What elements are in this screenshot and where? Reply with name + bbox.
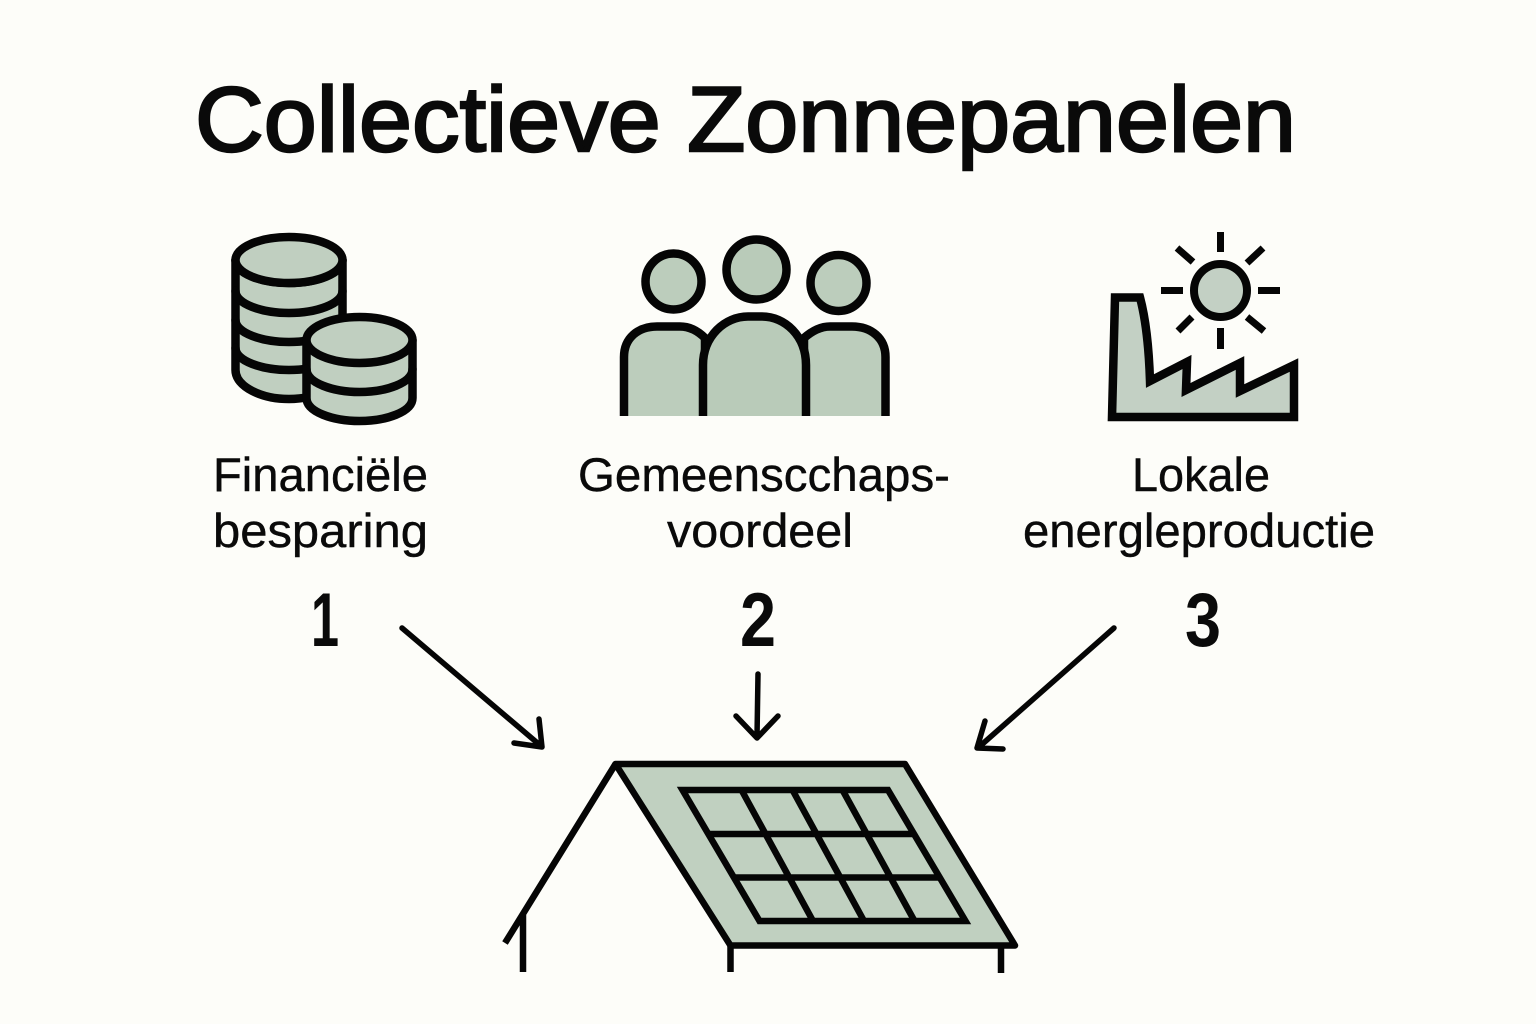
arrow 2 [736, 674, 778, 738]
label: Gemeenschapsvoordeel [578, 448, 950, 557]
icon: coin stacks [236, 237, 412, 421]
small coin stack [306, 317, 412, 421]
person left [624, 254, 705, 430]
number 3: 3 [1185, 578, 1221, 663]
person centre [703, 240, 806, 430]
arrow 3 [977, 628, 1114, 749]
label: Lokale energieproductie: Lokale [1132, 448, 1270, 501]
label: Financiele besparing: Financiële [213, 448, 428, 501]
label: Financiele besparing: besparing [213, 504, 428, 557]
title: Collectieve Zonnepanelen [195, 69, 1296, 171]
mask below bodies [610, 416, 900, 440]
icon: factory with sun [1112, 232, 1294, 417]
label: Gemeenschapsvoordeel: voordeel [667, 504, 853, 557]
roof panel [616, 764, 1015, 946]
icon: three people [610, 240, 900, 440]
label: Financiele besparing [213, 448, 428, 557]
number 2: 2 [740, 578, 776, 663]
number 1: 1 [311, 578, 339, 663]
solar grid [682, 790, 966, 921]
factory [1112, 298, 1294, 417]
large coin stack [236, 237, 342, 399]
label: Lokale energieproductie [1023, 448, 1375, 557]
label: Gemeenschapsvoordeel: Gemeenscchaps- [578, 448, 950, 501]
arrow 1 [402, 628, 542, 747]
person right [804, 255, 886, 430]
label: Lokale energieproductie: energleproductie [1023, 504, 1375, 557]
roof left slope and walls [505, 764, 1001, 973]
sun [1161, 232, 1280, 349]
icon: roof with solar panel [505, 764, 1015, 973]
